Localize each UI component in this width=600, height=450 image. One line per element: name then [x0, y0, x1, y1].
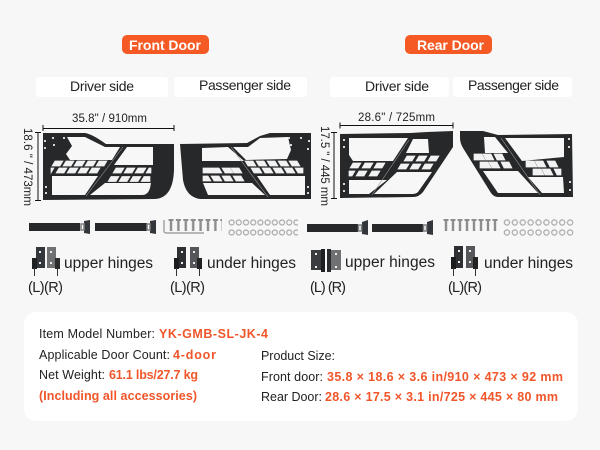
dimension: rear height: 17.5 " / 445 mm: [318, 126, 330, 206]
spec: net weight: 61.1 lbs/27.7 kg: [109, 368, 198, 382]
spec: rear door size: 28.6 × 17.5 × 3.1 in/725 × 445 × 80 mm: [325, 390, 558, 404]
spec: front door size: 35.8 × 18.6 × 3.6 in/910 × 473 × 92 mm: [327, 370, 563, 384]
label: rear upper hinges: upper hinges: [345, 254, 435, 271]
door: rear passenger side: [460, 131, 573, 197]
spec: item model number: Item Model Number:: [39, 327, 155, 341]
hinges: rear under: [451, 246, 478, 276]
label: front under hinges: under hinges: [207, 255, 296, 272]
dimension: rear width: [340, 112, 453, 128]
heading: Front Door: Front Door: [129, 37, 202, 53]
spec: item model number: YK-GMB-SL-JK-4: [159, 327, 268, 341]
label: front passenger side: Passenger side: [199, 77, 291, 93]
door: rear driver side: [340, 131, 453, 198]
label: rear passenger side: Passenger side: [468, 77, 559, 93]
spec: item model number: [39, 327, 268, 341]
heading: Rear Door: Rear Door: [417, 37, 485, 53]
spec: front door size: Front door:: [261, 370, 323, 384]
label: rear under left and right: (L)(R): [448, 280, 482, 296]
label: rear upper left and right: (L) (R): [310, 280, 346, 296]
spec: net weight: [39, 368, 198, 382]
spec: product size heading: Product Size:: [261, 349, 335, 363]
spec: door count: 4-door: [173, 348, 216, 362]
door: front passenger side: [180, 133, 311, 199]
dimension: front width: [43, 113, 174, 131]
hinges: rear upper: [311, 249, 341, 272]
hinges: front upper: [32, 247, 60, 276]
heading: Rear Door: [405, 35, 492, 54]
label: front driver side: Driver side: [70, 78, 134, 94]
accessories: rear door straps and hardware: [307, 218, 574, 238]
dimension: rear height: [318, 126, 337, 206]
door: front driver side: [43, 133, 174, 200]
dimension: front width: 35.8" / 910mm: [72, 113, 147, 125]
spec: door count: Applicable Door Count:: [39, 348, 170, 362]
dimension: front height: [21, 128, 41, 206]
label: rear passenger side: [453, 77, 572, 97]
spec: rear door size: Rear Door:: [261, 390, 322, 404]
hinges: front under: [174, 247, 202, 276]
label: rear driver side: [330, 77, 449, 97]
label: rear under hinges: under hinges: [484, 255, 573, 272]
label: front upper left and right: (L)(R): [28, 280, 63, 296]
spec: weight note: (Including all accessories): [39, 389, 197, 403]
dimension: rear width: 28.6" / 725mm: [358, 112, 435, 124]
panel: product specifications: [24, 312, 578, 421]
accessories: front door straps and hardware: [29, 218, 298, 238]
label: front upper hinges: upper hinges: [64, 255, 153, 272]
spec: net weight: Net Weight:: [39, 368, 105, 382]
label: front passenger side: [174, 77, 307, 97]
dimension: front height: 18.6 " / 473mm: [21, 128, 33, 206]
heading: Front Door: [122, 35, 209, 54]
label: rear driver side: Driver side: [365, 78, 429, 94]
label: front under left and right: (L)(R): [170, 280, 205, 296]
label: front driver side: [36, 77, 168, 97]
